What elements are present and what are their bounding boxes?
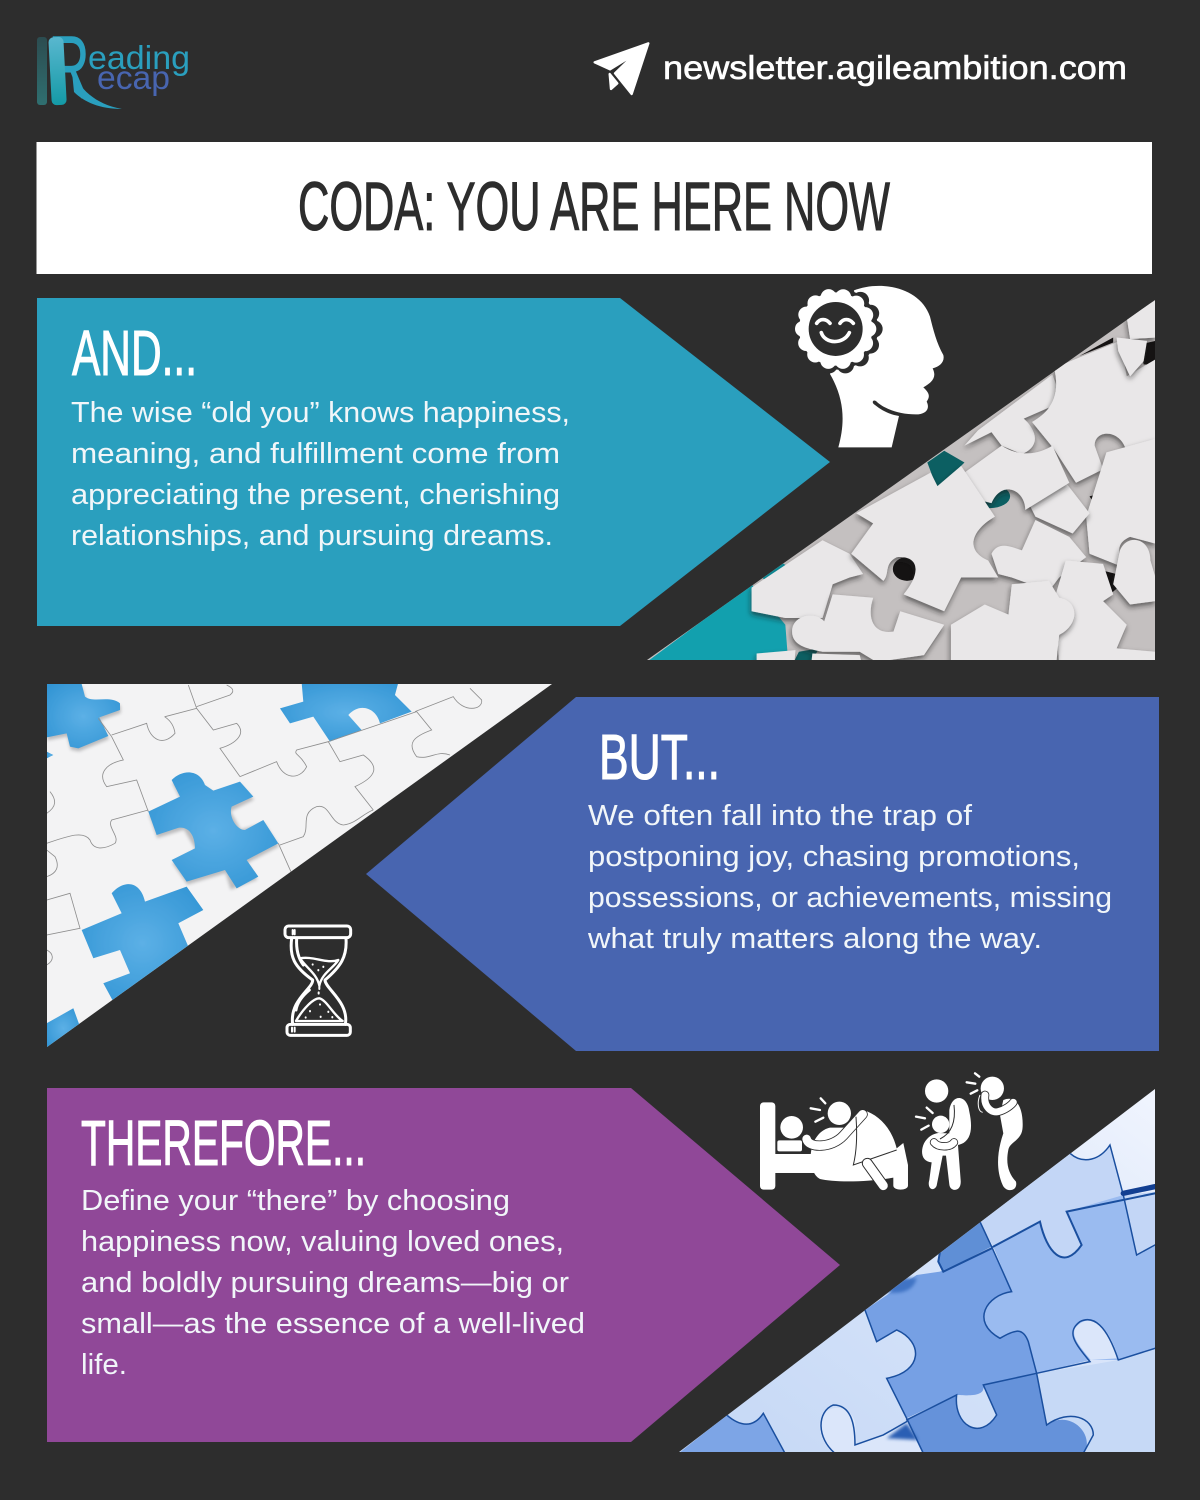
panel: THEREFORE: small—as the essence of a well-lived bbox=[81, 1308, 585, 1340]
sub-icon: person crying bbox=[967, 1073, 1023, 1190]
icon: paper plane bbox=[595, 43, 648, 94]
panel: AND: meaning, and fulfillment come from bbox=[71, 438, 560, 470]
sub-icon: adult hugging child bbox=[916, 1079, 971, 1190]
icon: hourglass bbox=[285, 926, 351, 1035]
panel: AND: relationships, and pursuing dreams. bbox=[71, 520, 553, 552]
panel: BUT: We often fall into the trap of bbox=[588, 800, 973, 832]
panel: THEREFORE bbox=[47, 1088, 840, 1442]
panel: THEREFORE: and boldly pursuing dreams—big or bbox=[81, 1267, 569, 1299]
panel: BUT: postponing joy, chasing promotions, bbox=[588, 841, 1080, 873]
panel: AND: The wise “old you” knows happiness, bbox=[71, 397, 570, 429]
panel: BUT: possessions, or achievements, missing bbox=[588, 882, 1112, 914]
logo: Reading Recap: eading bbox=[88, 39, 190, 76]
panel: AND: AND... bbox=[72, 317, 197, 389]
panel: AND: appreciating the present, cherishing bbox=[71, 479, 560, 511]
panel: THEREFORE: happiness now, valuing loved ones, bbox=[81, 1226, 564, 1258]
panel: BUT: what truly matters along the way. bbox=[587, 923, 1042, 955]
sub-icon: hospital bed and comforting figure bbox=[760, 1098, 908, 1190]
panel: BUT: BUT... bbox=[599, 721, 720, 793]
panel: THEREFORE: THEREFORE... bbox=[81, 1107, 366, 1179]
logo: Reading Recap: R bbox=[48, 18, 90, 118]
icon: people comforting and grieving bbox=[760, 1073, 1023, 1190]
panel: AND bbox=[37, 298, 830, 626]
website url: newsletter.agileambition.com bbox=[663, 49, 1127, 86]
image: white puzzle with blue gaps bbox=[40, 680, 560, 1050]
panel: THEREFORE: life. bbox=[81, 1349, 127, 1381]
panel: BUT bbox=[366, 697, 1159, 1051]
logo: Reading Recap bbox=[37, 18, 190, 118]
icon: happy mind head bbox=[797, 286, 944, 447]
image: blue puzzle close-up bbox=[670, 1085, 1160, 1455]
logo: Reading Recap: ecap bbox=[97, 59, 170, 96]
title banner bbox=[36, 142, 1152, 274]
panel: THEREFORE: Define your “there” by choosing bbox=[81, 1185, 510, 1217]
image: scattered white puzzle pieces bbox=[640, 290, 1160, 669]
